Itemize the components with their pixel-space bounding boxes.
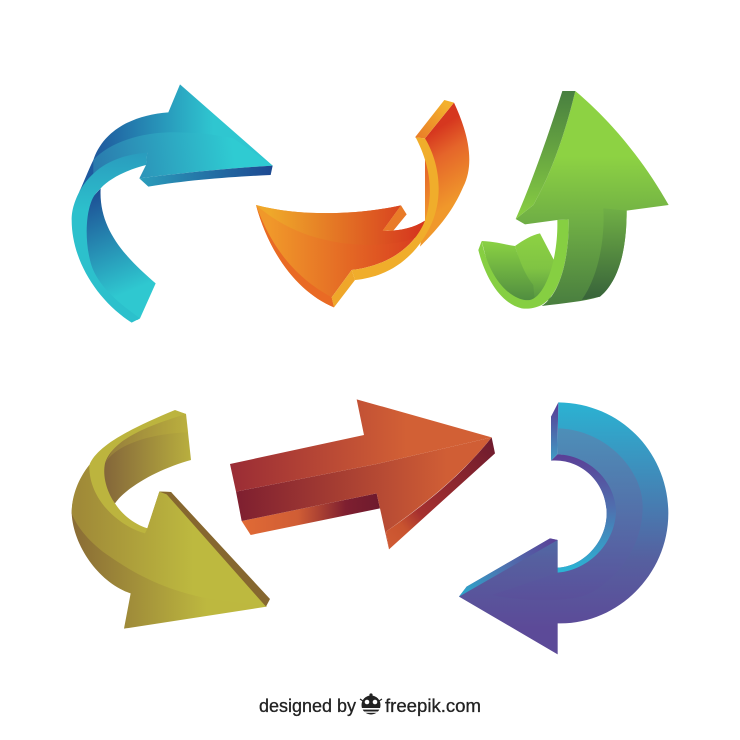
- arrow: green upward: [478, 91, 669, 309]
- arrow: blue curved: [72, 84, 273, 323]
- arrow: red straight: [230, 399, 495, 549]
- freepik credit: [259, 693, 481, 716]
- credit text: designed by: designed by: [259, 696, 356, 716]
- icon: freepik mascot: [360, 693, 382, 714]
- arrow: purple and blue U-turn: [459, 402, 668, 654]
- arrow: olive curved: [72, 410, 270, 629]
- arrow: orange curved: [256, 100, 469, 307]
- credit text: freepik.com: freepik.com: [385, 696, 481, 716]
